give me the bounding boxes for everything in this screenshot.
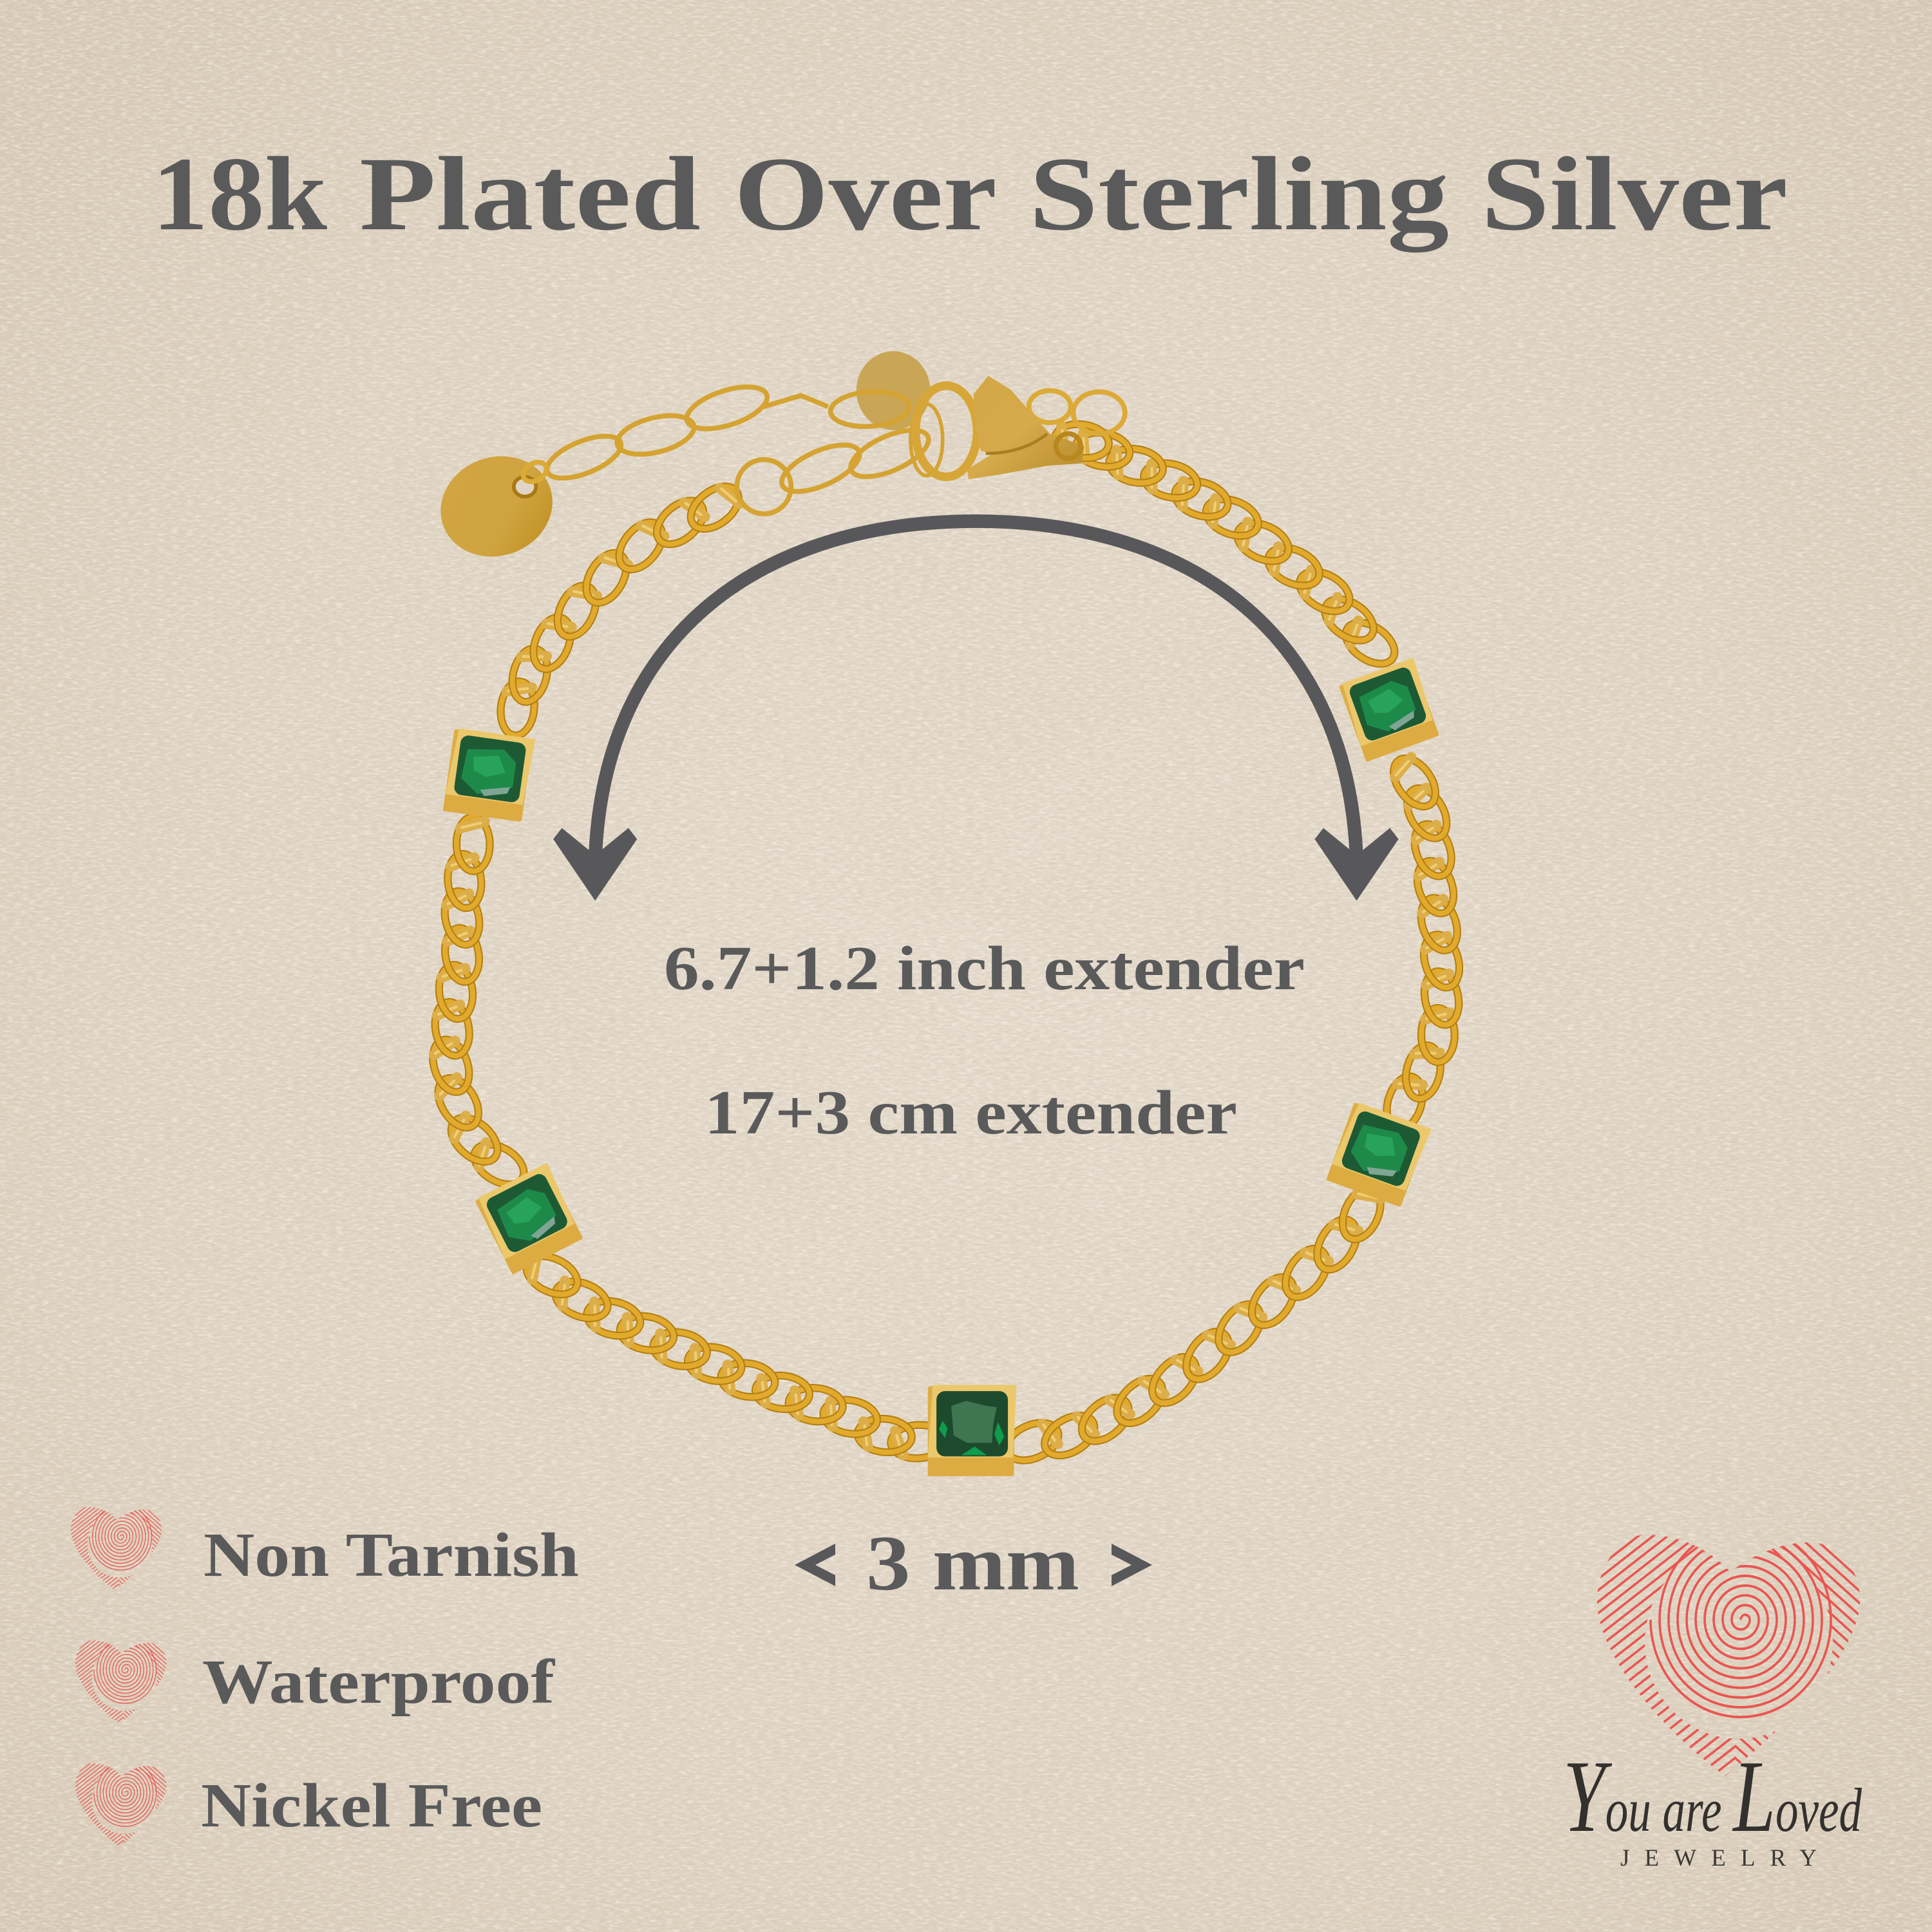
length in centimetres: 17+3 cm extender [705, 1078, 1237, 1148]
stone: upper left [443, 728, 535, 822]
stone: upper right [1338, 658, 1441, 762]
chevron right [1112, 1544, 1152, 1586]
title: Silver [1481, 136, 1788, 252]
stone: lower right [1326, 1101, 1432, 1208]
jump ring at clasp [916, 386, 977, 477]
icon: heart 2 [73, 1638, 170, 1727]
chain width label: 3 mm [866, 1520, 1079, 1607]
feature list [69, 1504, 579, 1850]
icon: heart 1 [69, 1504, 166, 1593]
logo sub wordmark: JEWELRY [1620, 1845, 1817, 1871]
chain links [451, 441, 1442, 1442]
stone: bottom [928, 1385, 1016, 1476]
logo script wordmark: You are Loved [1563, 1739, 1862, 1853]
title: 18k [152, 136, 327, 252]
round tag charm [426, 440, 567, 572]
feature: non tarnish: Non Tarnish [204, 1520, 579, 1590]
extender chain upper [542, 379, 911, 487]
feature: nickel free: Nickel Free [201, 1771, 542, 1841]
icon: heart 3 [73, 1761, 170, 1850]
size arrow: curved double arrow [553, 521, 1399, 901]
title: Sterling [1029, 136, 1449, 252]
extender chain lower [737, 404, 943, 514]
bracelet with green stones [426, 351, 1442, 1476]
stone: lower left [475, 1162, 585, 1274]
chevron left [795, 1544, 835, 1586]
back disc charm [857, 351, 931, 430]
title [152, 136, 1788, 252]
arrowhead right [1314, 828, 1399, 901]
feature: waterproof: Waterproof [202, 1647, 556, 1717]
chain width label [795, 1520, 1152, 1607]
arrowhead left [553, 828, 637, 901]
lobster clasp [967, 376, 1084, 479]
logo heart fingerprint [1591, 1526, 1871, 1784]
title: Plated [359, 136, 701, 252]
logo [1563, 1526, 1871, 1871]
end rings [1029, 391, 1125, 433]
length in inches: 6.7+1.2 inch extender [664, 934, 1305, 1003]
title: Over [734, 136, 997, 252]
